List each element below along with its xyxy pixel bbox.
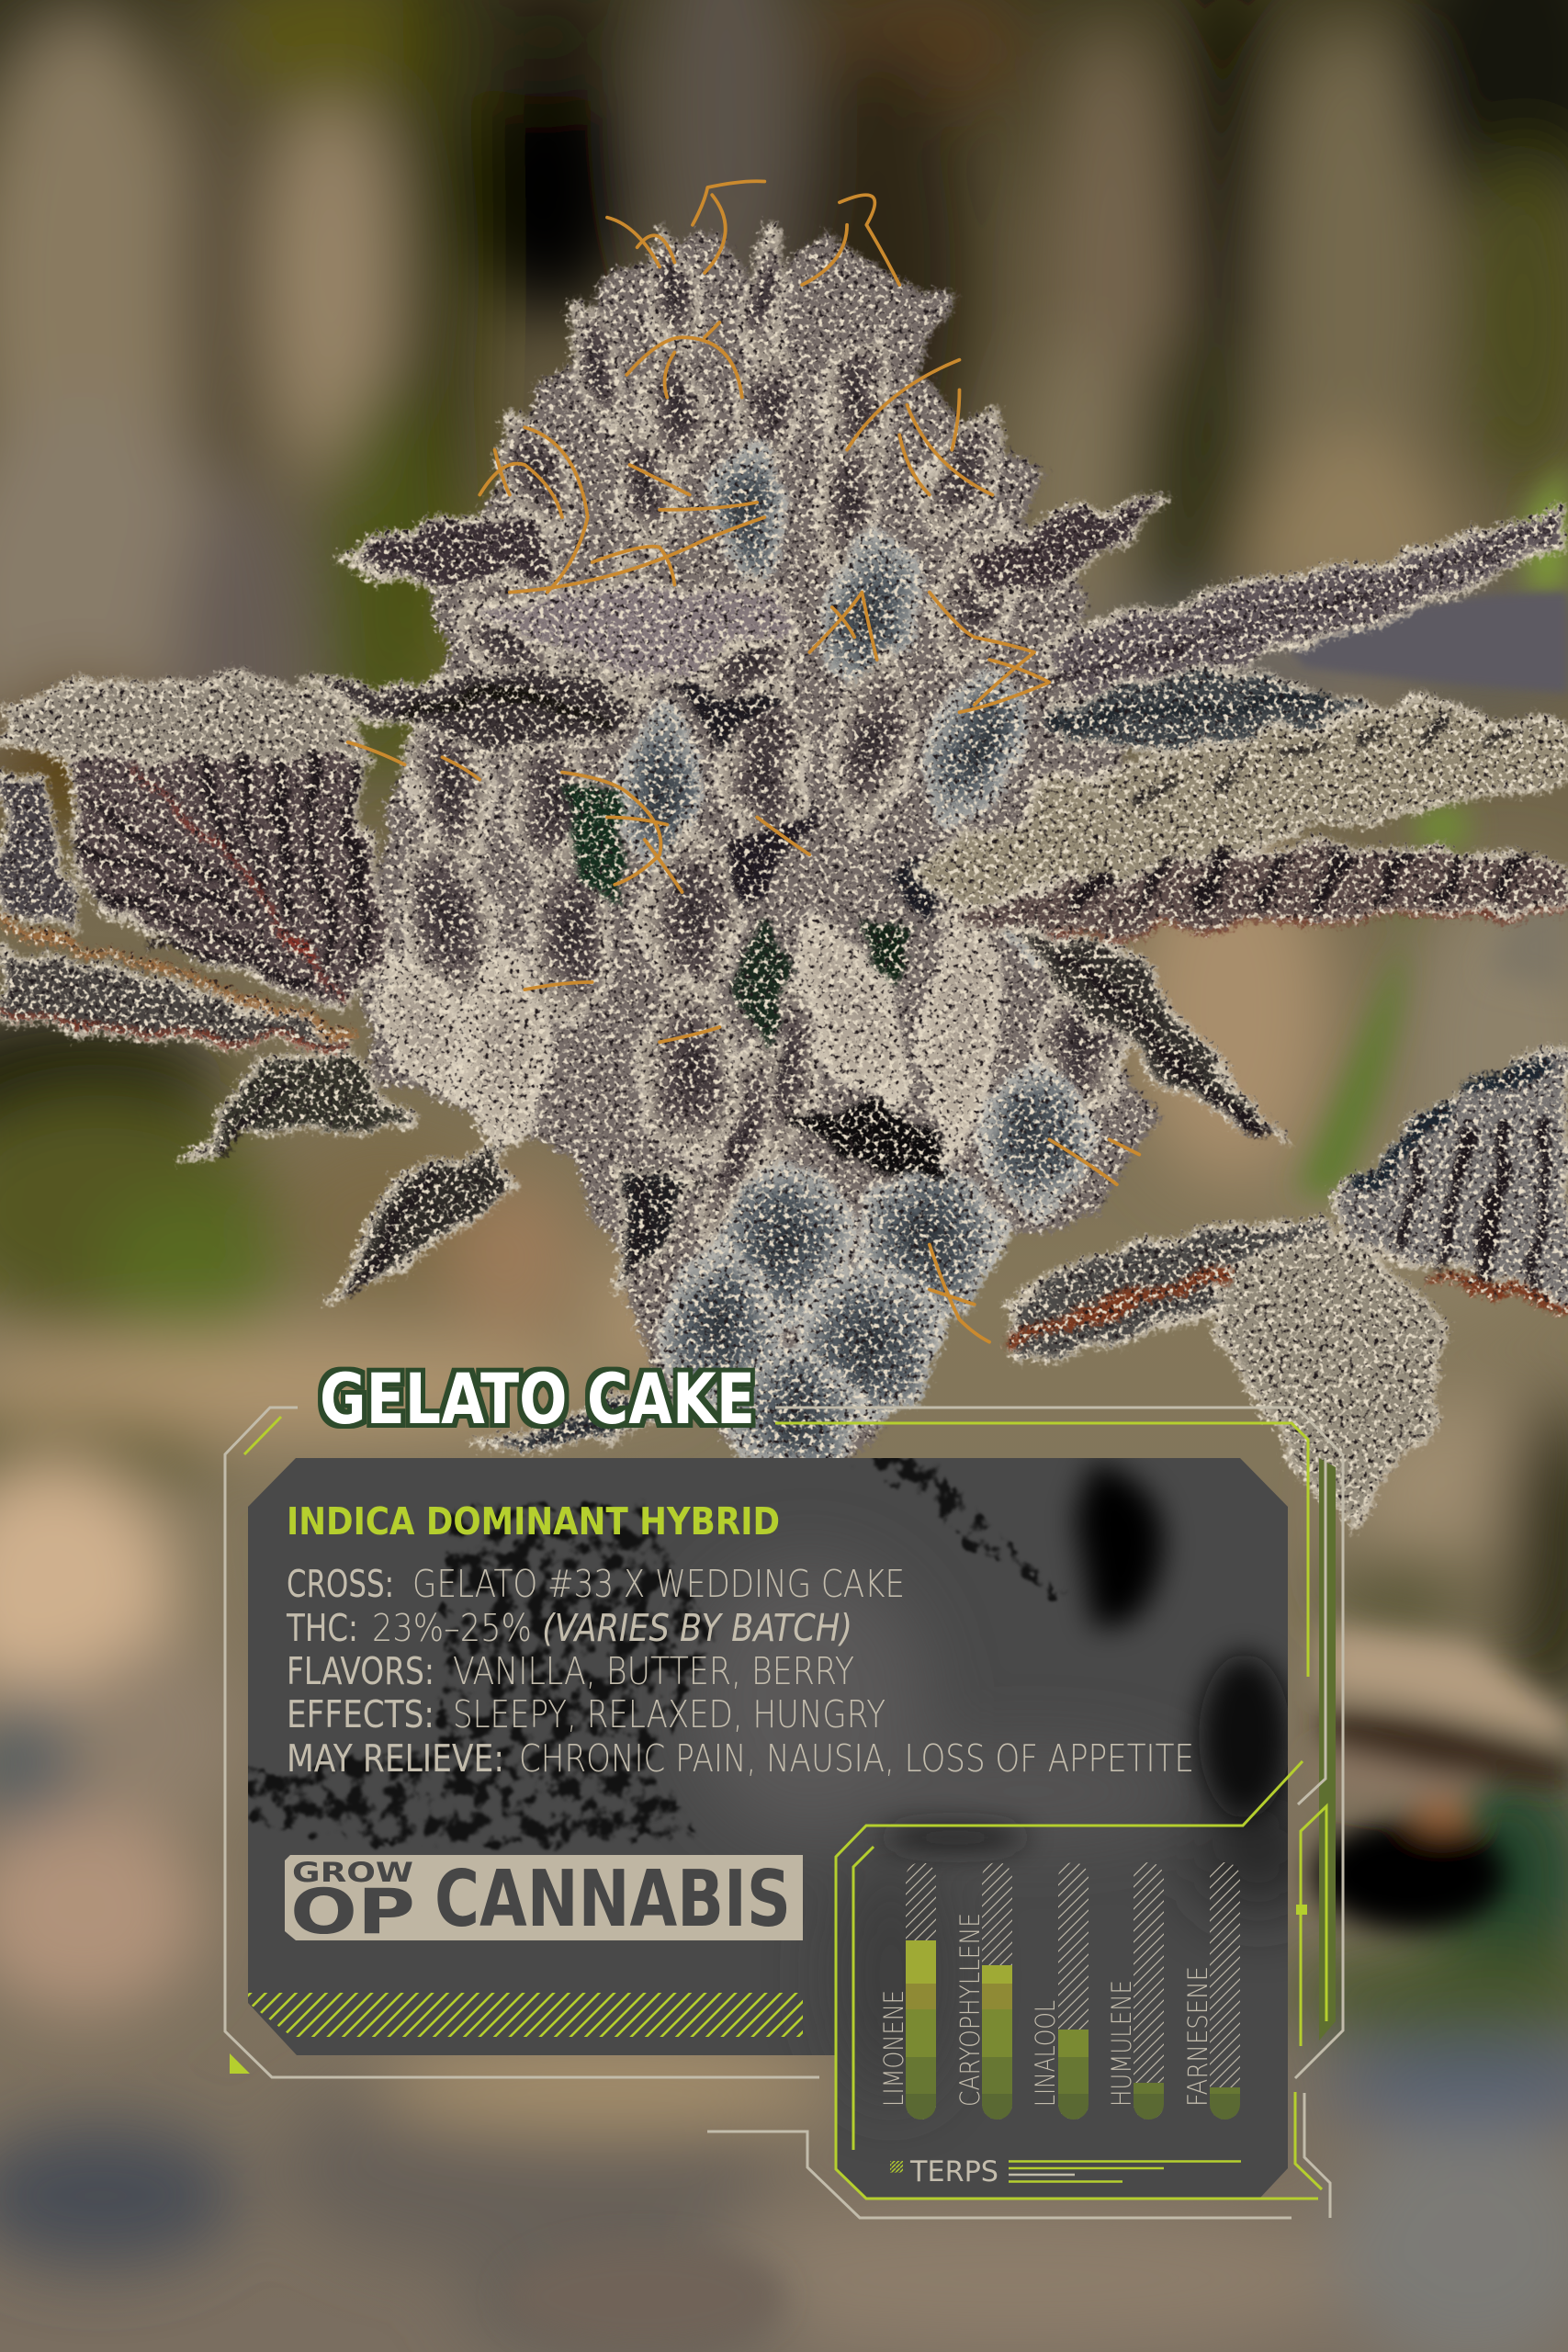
bar: Farnesene: FARNESENE [1182, 1966, 1213, 2107]
bar: Caryophyllene [954, 1862, 1012, 2120]
plant with trichome frost [0, 215, 1568, 1526]
pale bracts [349, 874, 1011, 1261]
frame: right beige line [775, 1408, 1343, 2078]
strain details: SLEEPY, RELAXED, HUNGRY [453, 1692, 886, 1736]
bar: Humulene [1106, 1862, 1164, 2120]
leaf: hanging pale [1207, 1229, 1447, 1526]
strain details: 23%–25% (VARIES BY BATCH) [372, 1606, 852, 1650]
bar: Caryophyllene: CARYOPHYLLENE [954, 1913, 986, 2107]
strain details: CROSS: [287, 1562, 394, 1606]
dark crevices [562, 674, 959, 1215]
frame: outer beige line [225, 1408, 819, 2077]
frosted leaves [0, 492, 1568, 1526]
leaf: striped dark [937, 847, 1568, 933]
strain details: GELATO #33 X WEDDING CAKE [412, 1562, 905, 1606]
bar: Linalool: LINALOOL [1030, 2000, 1061, 2107]
bract: low dark [479, 1387, 690, 1449]
subtitle: INDICA DOMINANT HYBRID [287, 1499, 780, 1544]
speckled leaves beneath panel [248, 1458, 1079, 1847]
logo: Grow Op Cannabis: CANNABIS [434, 1854, 791, 1945]
leaf: far right [1326, 1049, 1568, 1305]
leaf: right lobes dark [1049, 667, 1379, 750]
logo: Grow Op Cannabis [285, 1854, 803, 1949]
strain details [286, 1562, 1194, 1781]
bar: Limonene [878, 1862, 936, 2120]
corner triangle [230, 2053, 250, 2074]
chart: terpene capsules [878, 1862, 1240, 2120]
strain details: EFFECTS: [287, 1692, 434, 1736]
main bud cone [360, 225, 1155, 1477]
chart caption: Terps: TERPS [909, 2155, 998, 2188]
ghost leaf at bottom [505, 2242, 781, 2352]
frame: bottom beige [707, 2132, 1292, 2218]
bar: Linalool [1030, 1862, 1089, 2120]
panel: dark translucent info card [239, 1452, 1323, 2205]
blurred rear leaf [1281, 593, 1568, 693]
title: GELATO CAKE [320, 1358, 755, 1440]
bract: left side [348, 517, 552, 584]
frame: inner beige line [1298, 1458, 1325, 1804]
strain details: CHRONIC PAIN, NAUSIA, LOSS OF APPETITE [519, 1736, 1194, 1781]
frame: green connector with node [1296, 1806, 1326, 2046]
chart caption: Terps [890, 2155, 1241, 2188]
frame: green side band [1319, 1458, 1336, 2041]
orange pistils [348, 181, 1139, 1342]
bar: Limonene: LIMONENE [878, 1990, 909, 2107]
leaf: upper right [1042, 513, 1568, 712]
bar: Humulene: HUMULENE [1106, 1980, 1137, 2107]
ghost leaf left of panel [129, 1758, 250, 1879]
red leaf stems [0, 764, 1568, 1338]
frame: lower right beige [1304, 2093, 1330, 2218]
bract: right side [959, 492, 1172, 597]
leaf: serrated tan [915, 705, 1568, 915]
frame: terpene inner tick [853, 1847, 874, 2150]
bract: left curved [292, 667, 645, 752]
leaf: central pale [465, 584, 787, 684]
leaf: fan left [75, 757, 387, 1008]
leaf ribs [78, 527, 1559, 1297]
frame: green top line [775, 1423, 1308, 1677]
strain details: THC: [286, 1606, 358, 1650]
bar: Farnesene [1182, 1862, 1240, 2120]
logo: Grow Op Cannabis: OP [290, 1876, 415, 1949]
leaf: low left [0, 944, 348, 1046]
strain details: MAY RELIEVE: [287, 1736, 504, 1781]
hatched green band [248, 1993, 803, 2037]
spears [187, 1049, 408, 1167]
logo: Grow Op Cannabis: GROW [292, 1857, 413, 1888]
frame: lower right green [1295, 2092, 1322, 2189]
frame: terpene chart outline [836, 1761, 1318, 2199]
frame: green corner tick [244, 1417, 281, 1454]
bud bracts: fill layer [381, 215, 1157, 1483]
strain details: VANILLA, BUTTER, BERRY [453, 1649, 854, 1693]
leaf: top-left [0, 674, 375, 757]
photo: frosted cannabis bud and leaves [0, 181, 1568, 1526]
leaf: stem right [1004, 1215, 1337, 1364]
bract: dark spear [1020, 937, 1281, 1148]
leaf: far-left lobe [0, 780, 78, 933]
strain details: FLAVORS: [287, 1649, 434, 1693]
